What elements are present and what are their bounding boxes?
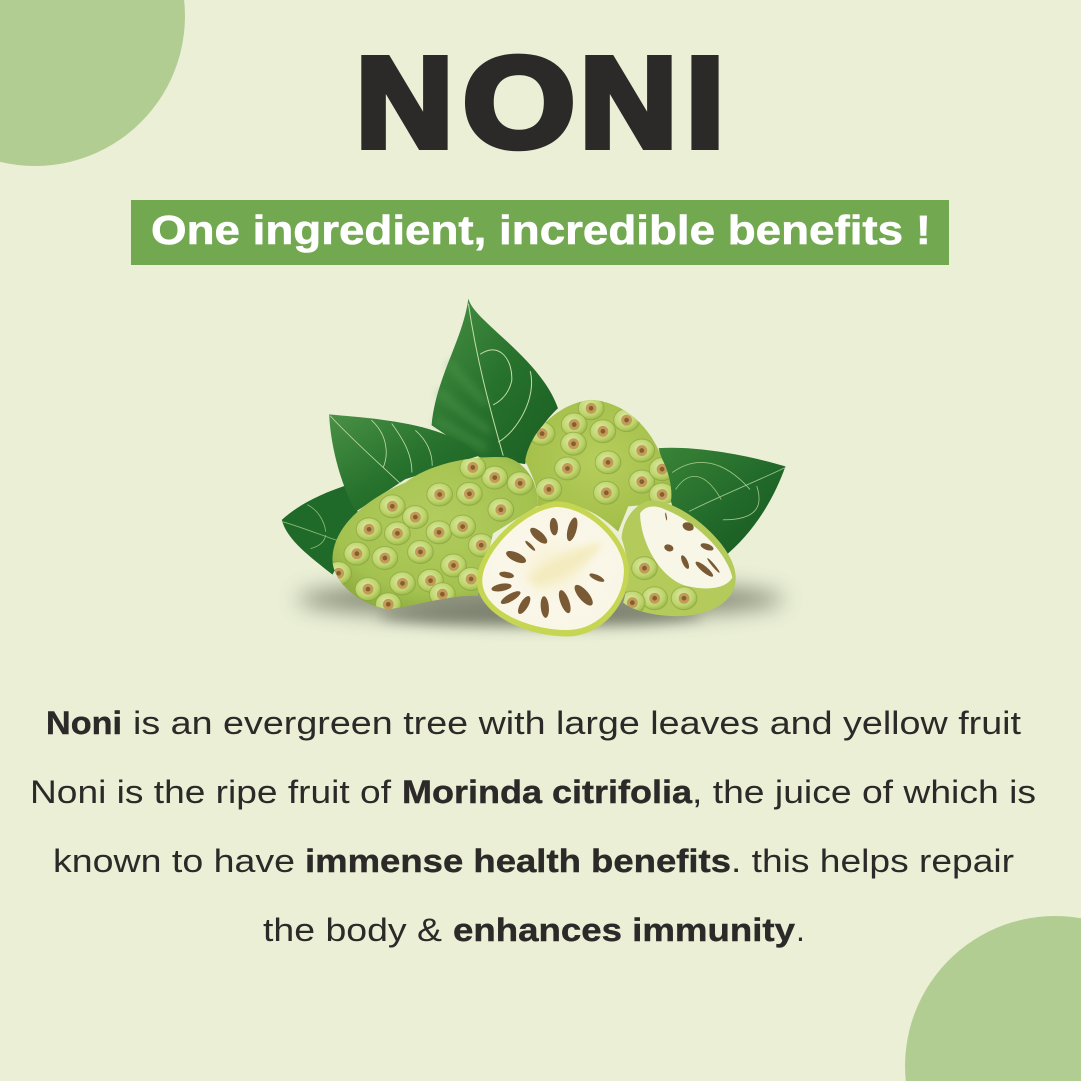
line 4 <box>263 912 805 948</box>
line 3: known to have <box>53 843 295 879</box>
leaf: bottom left <box>282 485 361 575</box>
line 4: . <box>796 912 805 948</box>
fruit: right half <box>619 500 736 616</box>
line 1: Noni <box>46 705 122 741</box>
title: O <box>463 32 575 174</box>
line 3: . this helps repair <box>731 843 1014 879</box>
line 4: the body & <box>263 912 442 948</box>
corner circle: bottom right <box>905 916 1081 1081</box>
corner circle: top left <box>0 0 185 166</box>
line 2: Noni is the ripe fruit of <box>30 774 391 810</box>
fruit: centre half <box>477 501 629 636</box>
fruit: left whole <box>326 456 538 616</box>
fruit: top right whole <box>525 397 675 532</box>
illustration: noni fruit and leaves <box>282 298 785 636</box>
line 1: is an evergreen tree with large leaves and yellow fruit <box>133 705 1021 741</box>
title <box>356 32 724 174</box>
banner: tagline <box>131 200 949 265</box>
line 2 <box>30 774 1036 810</box>
ground shadow <box>297 581 784 627</box>
line 2: Morinda citrifolia <box>402 774 692 810</box>
leaf: left <box>329 414 480 511</box>
line 3 <box>53 843 1014 879</box>
title: N <box>356 32 453 174</box>
line 2: , the juice of which is <box>692 774 1036 810</box>
leaf: top <box>432 298 558 464</box>
line 3: immense health benefits <box>305 843 731 879</box>
leaf: right <box>659 448 785 558</box>
banner: tagline: One ingredient, incredible benefits ! <box>151 207 931 253</box>
title: N <box>580 32 677 174</box>
description text <box>30 705 1036 948</box>
line 4: enhances immunity <box>453 912 795 948</box>
title: I <box>686 32 724 174</box>
